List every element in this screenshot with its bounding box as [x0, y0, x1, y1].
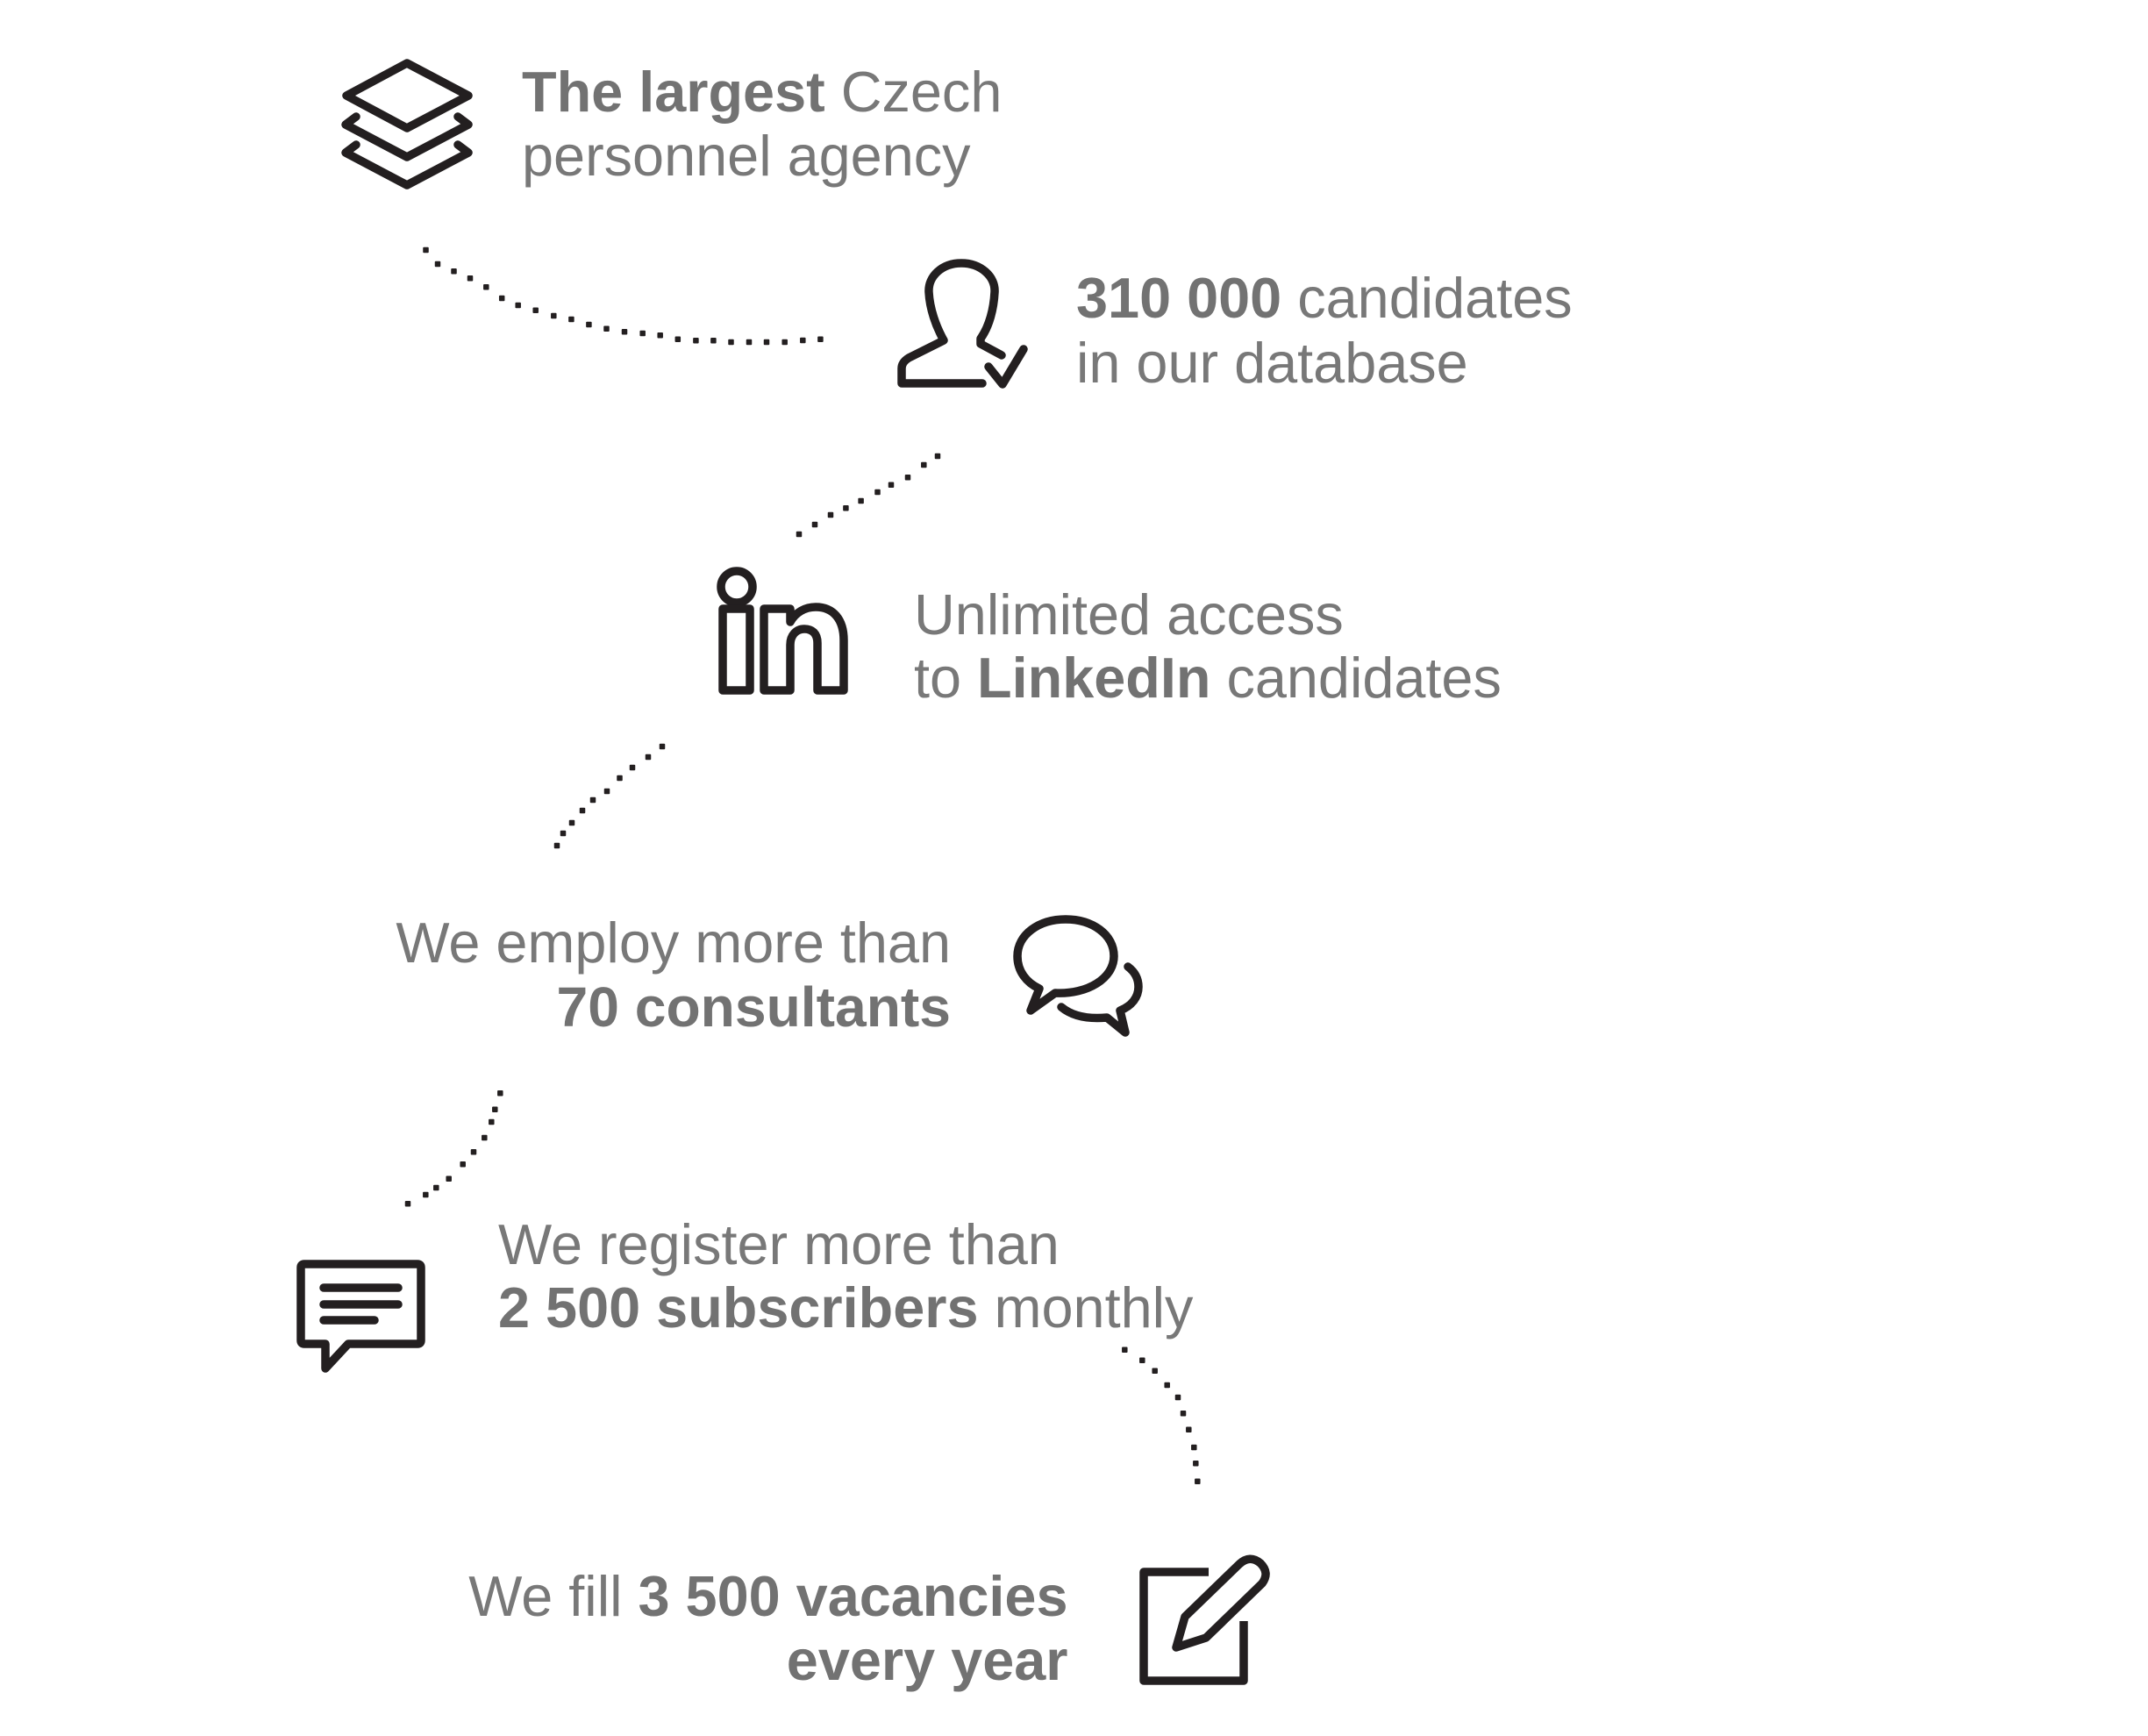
icon: pencil on square	[1144, 1559, 1266, 1681]
icon: LinkedIn outline	[721, 571, 844, 690]
icon: two speech bubbles	[1017, 919, 1138, 1032]
item 4: consultants	[396, 911, 1138, 1039]
text: consultants: 70 consultants	[557, 975, 951, 1039]
connector: item 3 to item 4	[554, 744, 665, 848]
icon: message bubble with text lines	[301, 1264, 421, 1368]
item 3: LinkedIn	[721, 571, 1502, 710]
connector: item 1 to item 2	[423, 247, 824, 345]
item 5: subscribers	[301, 1212, 1194, 1368]
text: candidates: 310 000 candidates	[1076, 266, 1573, 330]
connector: item 5 to item 6	[1122, 1347, 1201, 1484]
text: LinkedIn access: Unlimited access	[914, 582, 1344, 647]
text: candidates: in our database	[1076, 331, 1468, 395]
text: largest agency: The largest Czech	[522, 60, 1002, 124]
text: subscribers: We register more than	[498, 1212, 1060, 1276]
text: vacancies: We fill 3 500 vacancies	[468, 1564, 1068, 1628]
text: vacancies: every year	[787, 1628, 1068, 1692]
item 1: largest agency	[346, 60, 1002, 188]
text: consultants: We employ more than	[396, 911, 951, 975]
icon: layers stack	[346, 63, 468, 185]
icon: person with check mark	[902, 263, 1024, 384]
item 2: candidates	[902, 263, 1573, 395]
connector: item 4 to item 5	[405, 1090, 503, 1207]
text: subscribers: 2 500 subscribers monthly	[498, 1275, 1193, 1340]
text: LinkedIn access: to LinkedIn candidates	[914, 646, 1502, 710]
text: largest agency: personnel agency	[522, 124, 971, 188]
connector: item 2 to item 3	[796, 454, 940, 537]
item 6: vacancies	[468, 1559, 1266, 1692]
